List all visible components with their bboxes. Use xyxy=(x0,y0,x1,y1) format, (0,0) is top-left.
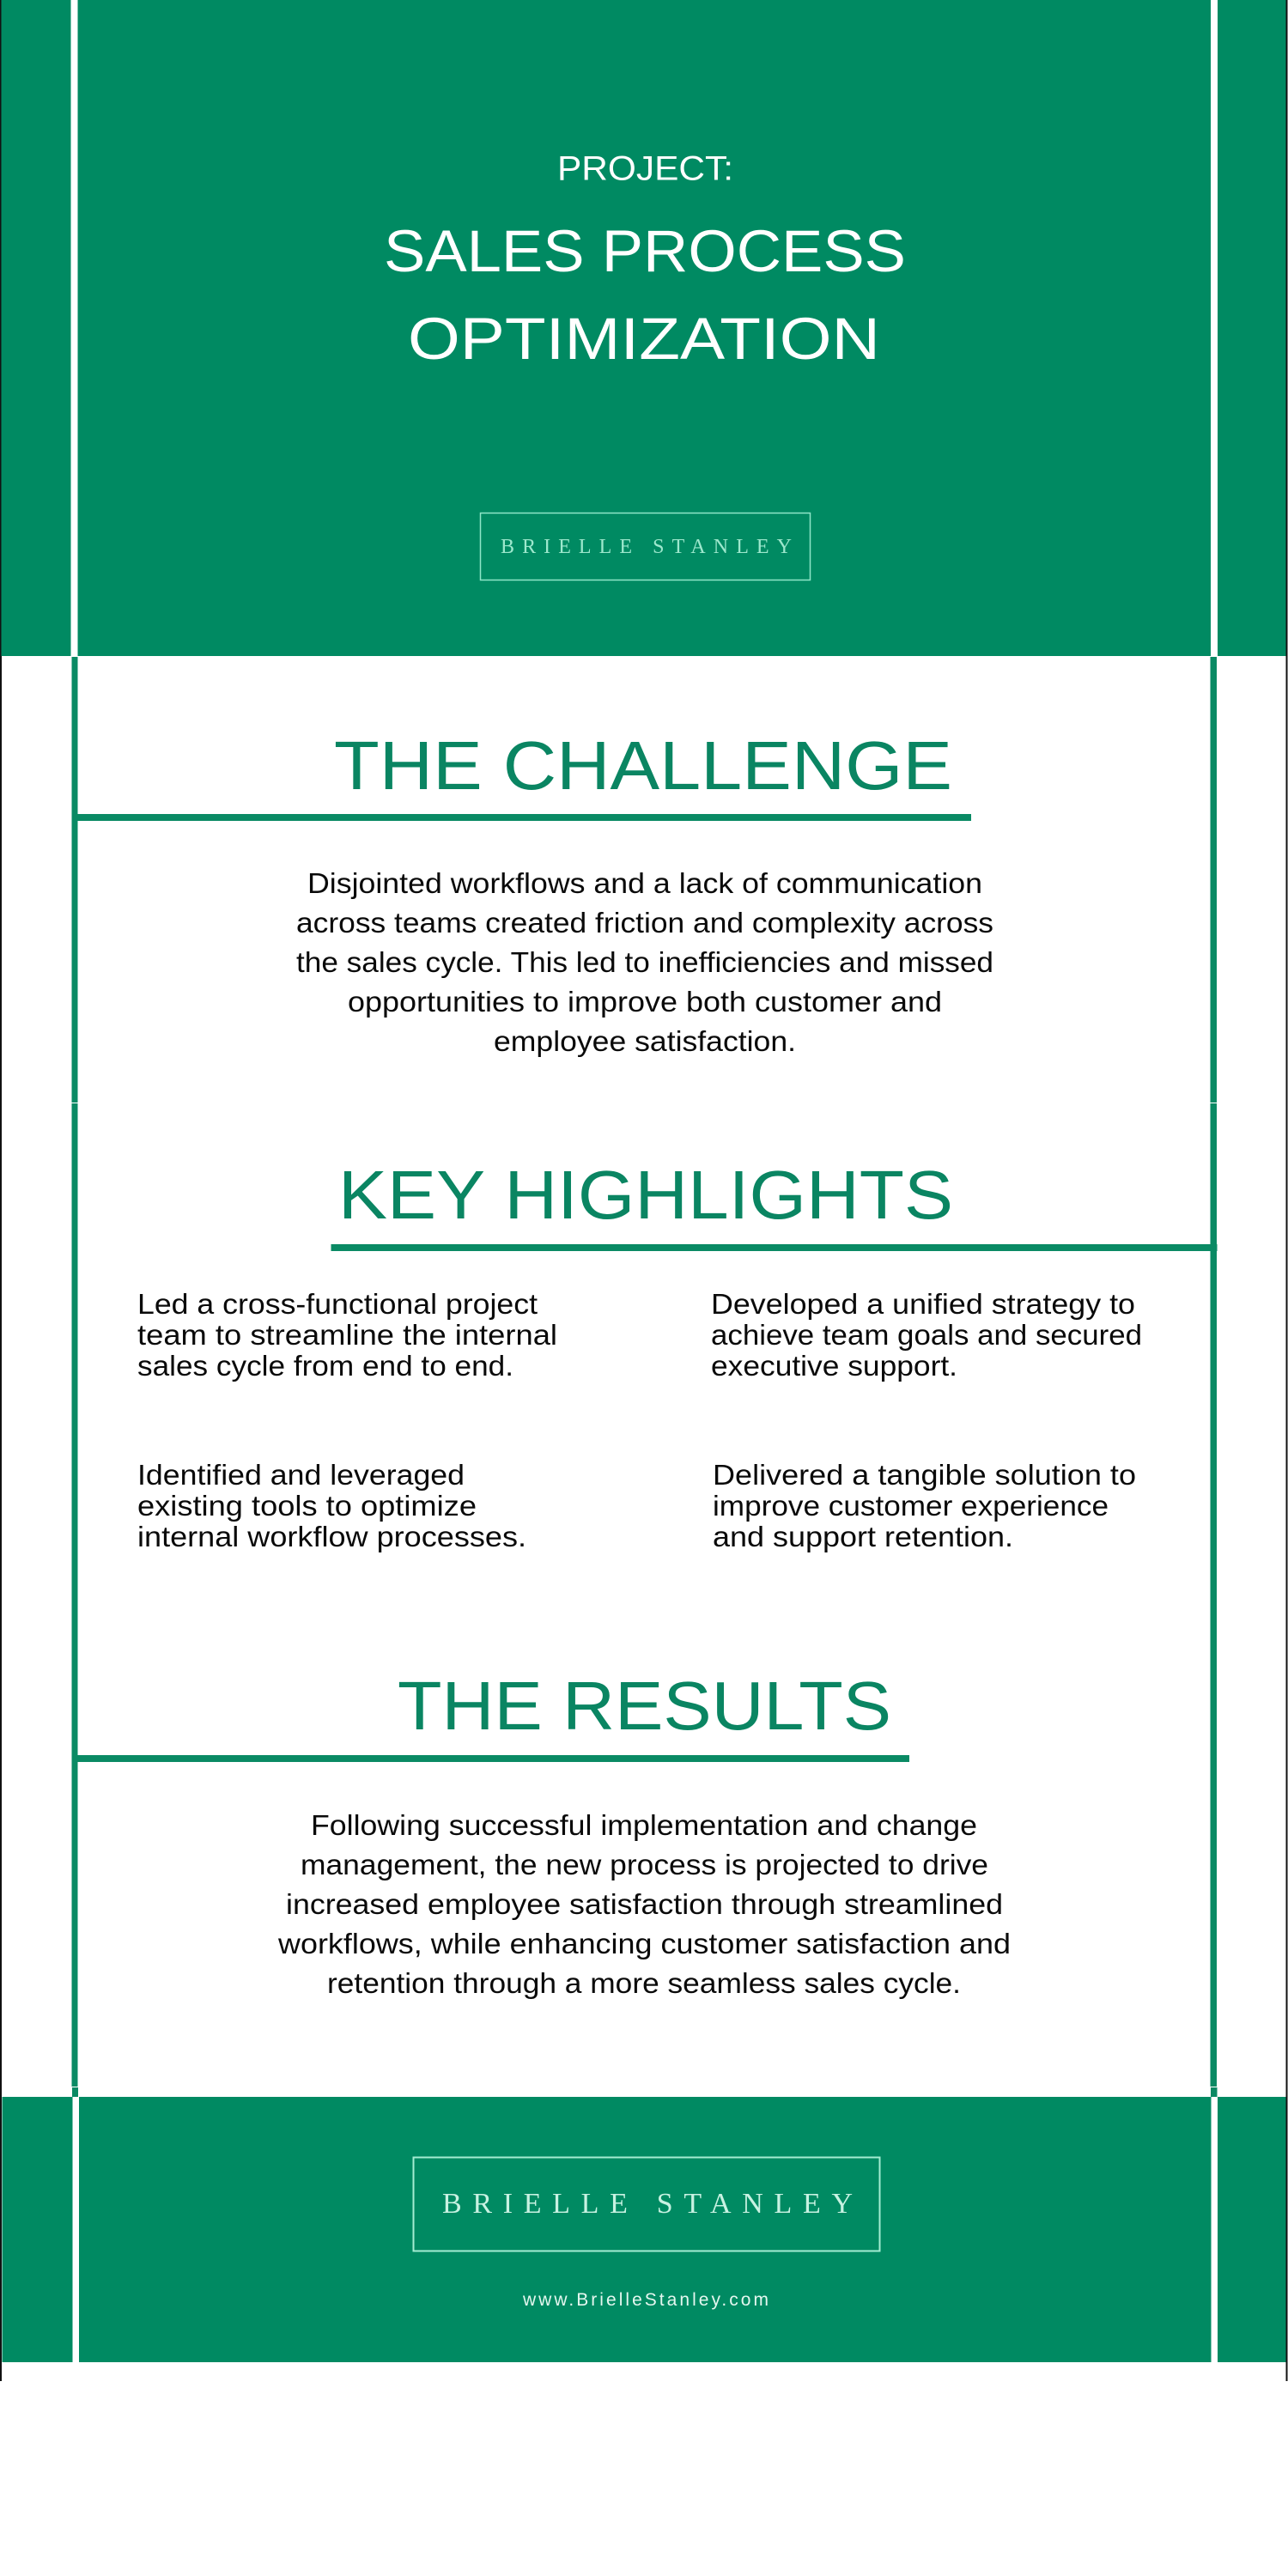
section: the results xyxy=(76,1668,1011,1999)
highlight: tangible solution: Delivered a tangible solution to xyxy=(713,1459,1136,1491)
text: results body: management, the new process is projected to drive xyxy=(301,1849,988,1880)
rule: key highlights xyxy=(331,1244,1218,1251)
frame: vertical green rails xyxy=(72,657,1218,2097)
text: challenge body: opportunities to improve both customer and xyxy=(348,986,942,1018)
section: key highlights xyxy=(137,1157,1218,1552)
text: results body: workflows, while enhancing customer satisfaction and xyxy=(277,1928,1011,1959)
highlight: unified strategy: executive support. xyxy=(711,1350,957,1382)
logo box: footer xyxy=(414,2157,879,2251)
highlight: unified strategy xyxy=(711,1288,1142,1382)
highlight: cross-functional team: Led a cross-functional project xyxy=(137,1288,538,1320)
highlight: existing tools: internal workflow processes. xyxy=(137,1521,526,1552)
text: results body: Following successful implementation and change xyxy=(311,1809,977,1841)
text: challenge body: employee satisfaction. xyxy=(494,1025,796,1057)
text: challenge body: across teams created friction and complexity across xyxy=(296,907,993,939)
highlight: existing tools xyxy=(137,1459,526,1552)
project label: PROJECT: xyxy=(557,149,733,187)
website url: www.BrielleStanley.com xyxy=(522,2290,769,2310)
highlight: tangible solution xyxy=(713,1459,1136,1552)
highlight: cross-functional team: team to streamline the internal xyxy=(137,1319,557,1351)
rule: the results xyxy=(76,1755,909,1762)
text: results body: increased employee satisfaction through streamlined xyxy=(286,1888,1003,1920)
highlight: tangible solution: and support retention. xyxy=(713,1521,1013,1552)
title: SALES PROCESS xyxy=(384,218,906,284)
rule: the challenge xyxy=(76,814,971,821)
panel: header xyxy=(2,0,1286,656)
highlight: unified strategy: Developed a unified strategy to xyxy=(711,1288,1135,1320)
text: challenge body: Disjointed workflows and a lack of communication xyxy=(307,867,982,899)
logo box: header xyxy=(481,513,811,580)
highlight: cross-functional team: sales cycle from end to end. xyxy=(137,1350,513,1382)
text: challenge body xyxy=(296,867,993,1057)
title xyxy=(384,218,906,372)
text: results body xyxy=(277,1809,1011,1999)
heading: the challenge: THE CHALLENGE xyxy=(334,727,952,804)
highlight: existing tools: Identified and leveraged xyxy=(137,1459,465,1491)
highlight: existing tools: existing tools to optimize xyxy=(137,1490,477,1522)
section: the challenge xyxy=(76,727,993,1057)
highlight: tangible solution: improve customer experience xyxy=(713,1490,1109,1522)
heading: key highlights: KEY HIGHLIGHTS xyxy=(338,1157,953,1233)
panel: footer xyxy=(2,2097,1286,2362)
text: challenge body: the sales cycle. This led to inefficiencies and missed xyxy=(296,946,993,978)
logo box: footer: BRIELLE STANLEY xyxy=(442,2188,853,2220)
logo box: header: BRIELLE STANLEY xyxy=(501,536,792,558)
highlight: cross-functional team xyxy=(137,1288,557,1382)
title: OPTIMIZATION xyxy=(408,306,880,372)
highlight: unified strategy: achieve team goals and secured xyxy=(711,1319,1142,1351)
text: results body: retention through a more seamless sales cycle. xyxy=(327,1967,961,1999)
heading: the results: THE RESULTS xyxy=(398,1668,891,1744)
